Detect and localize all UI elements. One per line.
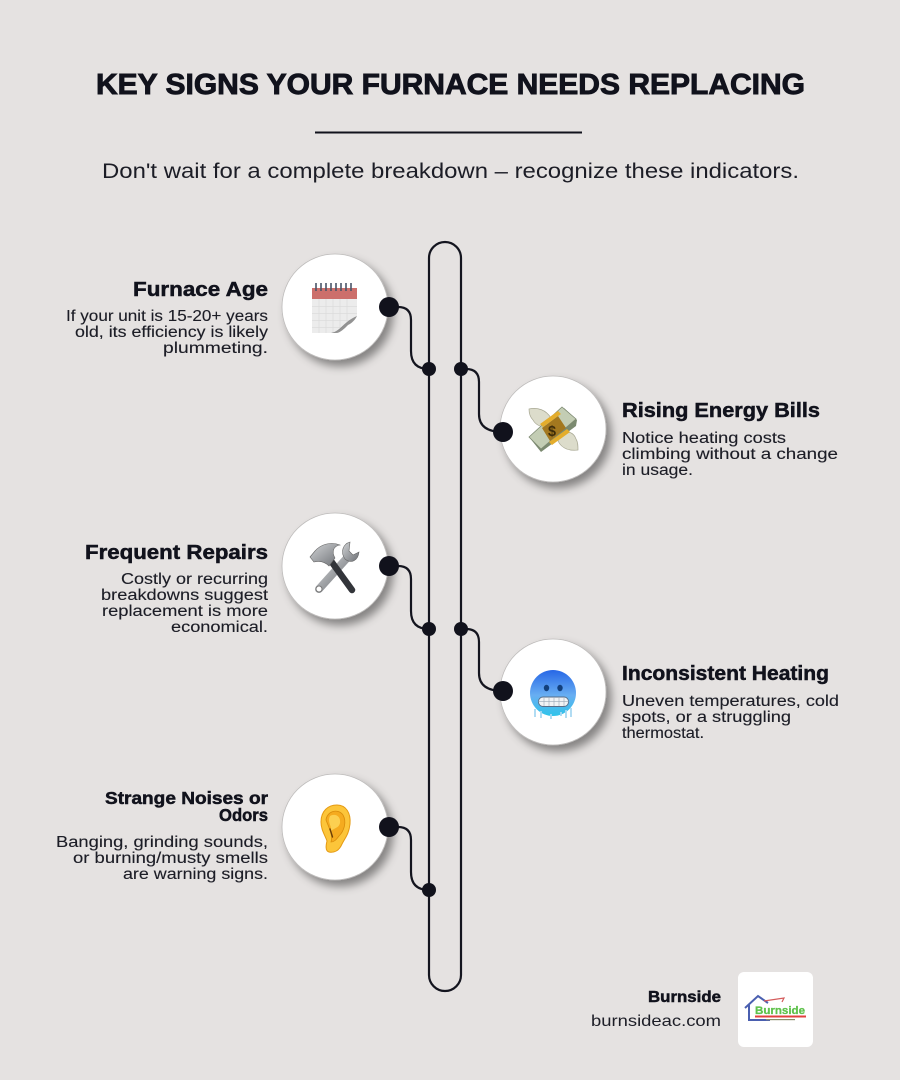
furnace age heading: Furnace Age bbox=[133, 279, 268, 301]
logo card bbox=[738, 972, 813, 1047]
icon: ear bbox=[321, 805, 350, 852]
connector: rising energy bills bbox=[454, 362, 503, 432]
rising energy bills heading: Rising Energy Bills bbox=[622, 400, 820, 422]
title divider bbox=[315, 132, 582, 134]
frequent repairs icon circle bbox=[282, 513, 388, 619]
strange noises description: or burning/musty smells bbox=[73, 850, 268, 867]
logo: Burnside bbox=[755, 1005, 805, 1017]
inconsistent heating icon circle bbox=[500, 639, 606, 745]
icon: hammer and wrench bbox=[310, 542, 359, 592]
panel: furnace age bbox=[66, 254, 399, 360]
strange noises description: Banging, grinding sounds, bbox=[56, 834, 268, 851]
timeline track bbox=[429, 242, 461, 991]
rising energy bills description: climbing without a change bbox=[622, 446, 838, 463]
furnace age icon circle bbox=[282, 254, 388, 360]
rising energy bills description: Notice heating costs bbox=[622, 430, 786, 447]
frequent repairs description bbox=[101, 571, 269, 636]
frequent repairs description: economical. bbox=[171, 619, 268, 636]
inconsistent heating heading: Inconsistent Heating bbox=[622, 663, 829, 685]
rising energy bills description: in usage. bbox=[622, 462, 693, 479]
inconsistent heating description: spots, or a struggling bbox=[622, 709, 791, 726]
strange noises heading: Strange Noises or bbox=[105, 788, 268, 808]
rising energy bills description bbox=[622, 430, 838, 479]
node bbox=[379, 556, 399, 576]
rising energy bills icon circle bbox=[500, 376, 606, 482]
node bbox=[379, 297, 399, 317]
frequent repairs description: breakdowns suggest bbox=[101, 587, 269, 604]
frequent repairs description: replacement is more bbox=[102, 603, 268, 620]
brand name: Burnside bbox=[648, 989, 721, 1006]
connector: strange noises bbox=[389, 827, 436, 897]
footer brand bbox=[591, 972, 813, 1047]
inconsistent heating description: thermostat. bbox=[622, 725, 704, 742]
furnace age description: old, its efficiency is likely bbox=[75, 324, 268, 341]
title: KEY SIGNS YOUR FURNACE NEEDS REPLACING bbox=[96, 69, 805, 101]
strange noises icon circle bbox=[282, 774, 388, 880]
strange noises heading bbox=[105, 788, 268, 825]
subtitle: Don't wait for a complete breakdown – recognize these indicators. bbox=[102, 160, 799, 183]
connector: furnace age bbox=[389, 307, 436, 376]
node bbox=[379, 817, 399, 837]
inconsistent heating description: Uneven temperatures, cold bbox=[622, 693, 839, 710]
icon: calendar bbox=[312, 283, 357, 333]
frequent repairs heading: Frequent Repairs bbox=[85, 542, 268, 564]
strange noises description bbox=[56, 834, 268, 883]
node bbox=[493, 681, 513, 701]
furnace age description: If your unit is 15-20+ years bbox=[66, 308, 268, 325]
strange noises description: are warning signs. bbox=[123, 866, 268, 883]
furnace age description bbox=[66, 308, 268, 357]
panel: strange noises or odors bbox=[56, 774, 399, 883]
connector: frequent repairs bbox=[389, 566, 436, 636]
panel: frequent repairs bbox=[85, 513, 399, 636]
icon: money with wings: $ bbox=[548, 423, 557, 440]
panel: rising energy bills bbox=[493, 376, 838, 482]
icon: freezing face bbox=[530, 670, 576, 719]
logo bbox=[745, 996, 806, 1020]
icon: money with wings bbox=[529, 407, 578, 452]
frequent repairs description: Costly or recurring bbox=[121, 571, 268, 588]
node bbox=[493, 422, 513, 442]
inconsistent heating description bbox=[622, 693, 839, 742]
brand url: burnsideac.com bbox=[591, 1013, 721, 1030]
panel: inconsistent heating bbox=[493, 639, 839, 745]
strange noises heading: Odors bbox=[219, 805, 268, 825]
connector: inconsistent heating bbox=[454, 622, 503, 691]
furnace age description: plummeting. bbox=[163, 340, 268, 357]
